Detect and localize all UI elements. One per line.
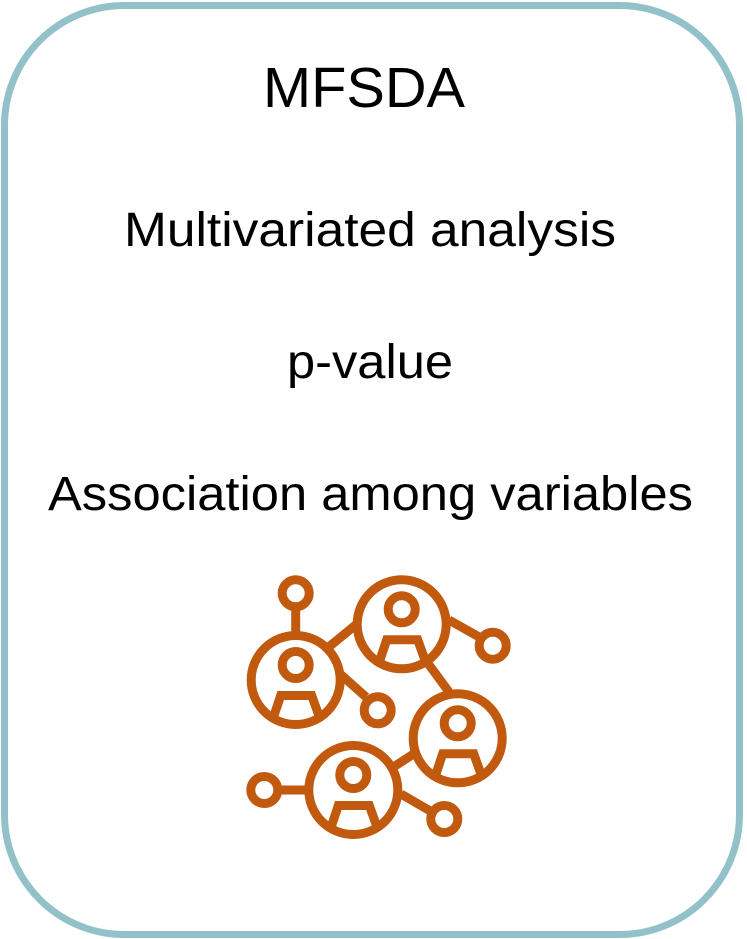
small node circles [251, 580, 506, 832]
icon: connected people network [251, 580, 506, 834]
text: p-value: p-value [287, 336, 453, 389]
person node: top [357, 580, 446, 669]
person node: left [251, 636, 340, 724]
connector lines [278, 607, 481, 812]
person node: right [413, 694, 502, 783]
person node: bottom [309, 746, 398, 834]
title: MFSDA: MFSDA [263, 56, 465, 120]
text: Association among variables: Association among variables [48, 468, 693, 521]
text: Multivariated analysis: Multivariated analysis [124, 204, 616, 257]
